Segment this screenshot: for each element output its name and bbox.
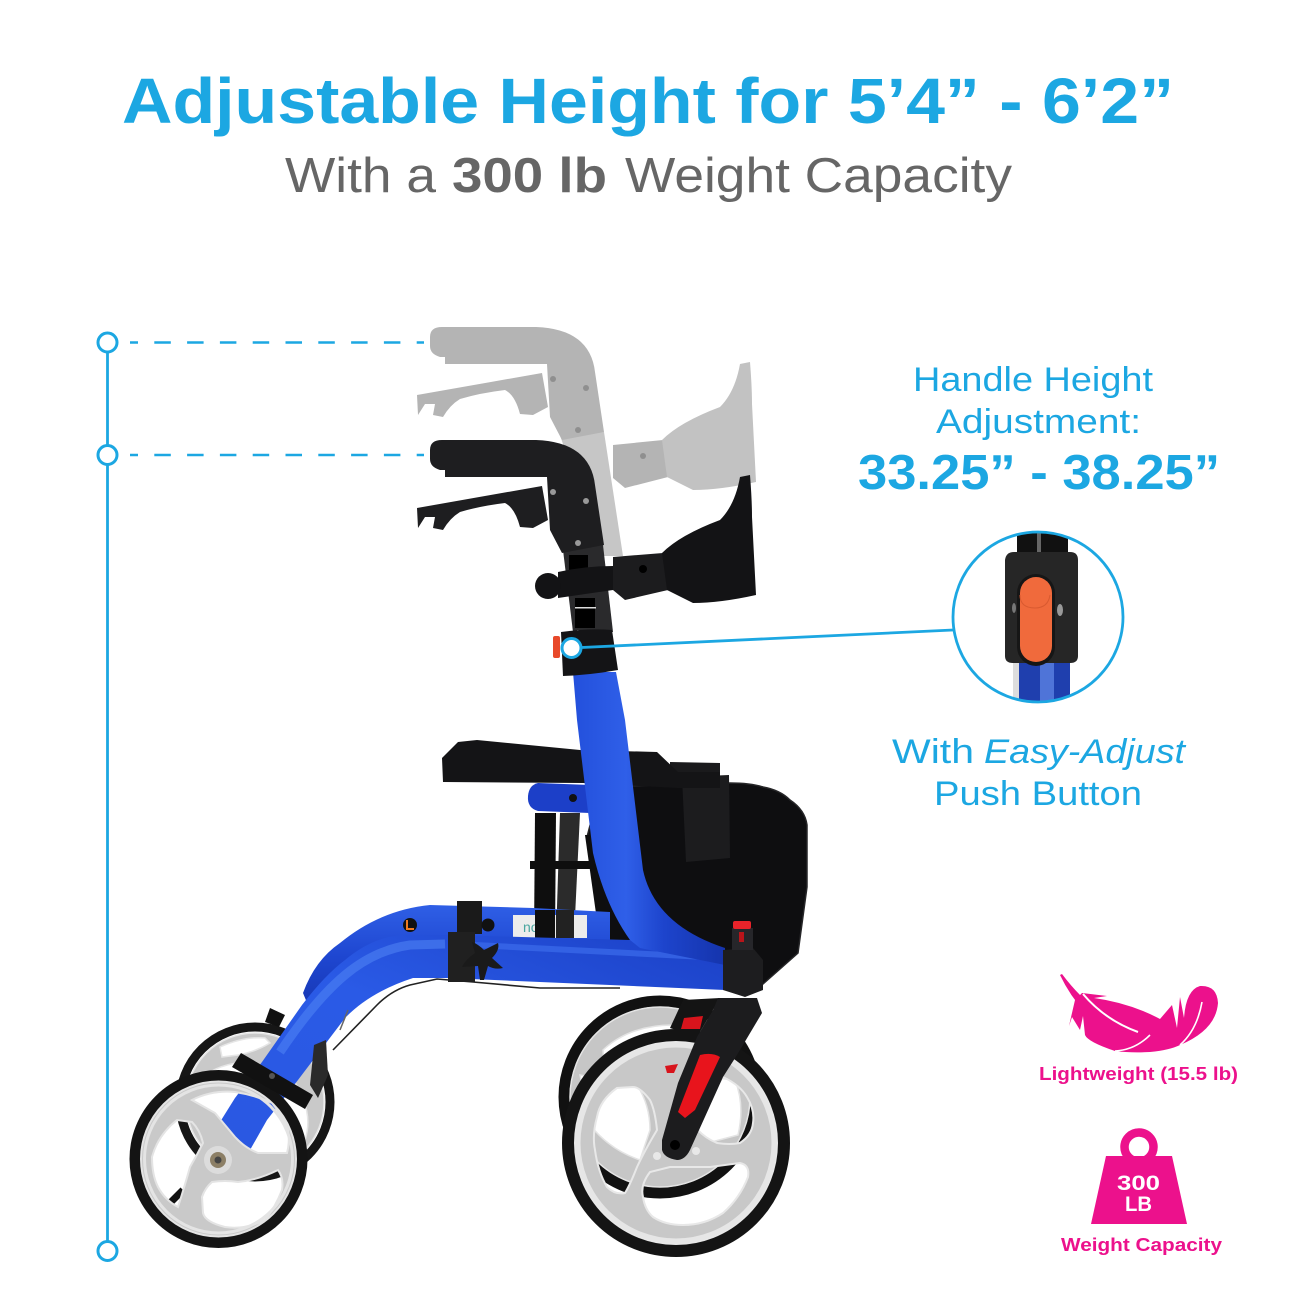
handle post (563, 545, 613, 632)
rear wheel clamp (232, 1008, 328, 1109)
bag (587, 783, 807, 984)
brake housing (723, 921, 763, 997)
brake cable (333, 979, 620, 1050)
easy-adjust text: Push Button (934, 775, 1142, 813)
seat bracket (528, 783, 590, 813)
icon: feather (1060, 974, 1218, 1052)
detail circle: push button (953, 530, 1123, 710)
seat folding legs (530, 813, 612, 942)
handle height text (858, 361, 1220, 500)
velcro strap (682, 775, 730, 862)
backrest with clamp and knob (535, 475, 756, 603)
handle height text: Adjustment: (936, 403, 1141, 441)
height scale with dashed guides (98, 333, 424, 1260)
brake lever (417, 486, 548, 530)
front rear wheel (135, 1076, 302, 1242)
easy-adjust text: With (892, 733, 974, 771)
rollator (135, 440, 807, 1250)
lightweight label: Lightweight (15.5 lb) (1039, 1064, 1238, 1084)
rail clamp and star knob (448, 932, 503, 982)
subtitle: Weight Capacity (625, 149, 1013, 203)
subtitle: 300 lb (452, 149, 607, 203)
subtitle (285, 149, 1013, 203)
seat (442, 740, 720, 788)
easy-adjust text (892, 733, 1187, 813)
front fork with reflectors (662, 998, 762, 1160)
subtitle: With a (285, 149, 437, 203)
upright blue tube (573, 672, 725, 965)
back rear wheel (180, 1027, 330, 1177)
main blue frame tube (220, 935, 725, 1150)
back front wheel (564, 1001, 756, 1193)
push button collar (553, 629, 618, 676)
icon: 300 lb weight (1091, 1132, 1187, 1224)
handle height text: Handle Height (913, 361, 1154, 399)
front big wheel (568, 1036, 784, 1250)
handle height text: 33.25” - 38.25” (858, 446, 1220, 500)
upper blue frame rail with label (303, 901, 610, 1010)
easy-adjust text: Easy-Adjust (984, 733, 1187, 771)
weight capacity label: Weight Capacity (1061, 1235, 1222, 1255)
ghost raised handle (417, 327, 756, 556)
callout line to detail (562, 630, 953, 658)
upper blue frame rail with label: no (523, 919, 539, 935)
black handle (417, 440, 604, 553)
icon: 300 lb weight: 300 (1117, 1172, 1160, 1195)
title: Adjustable Height for 5’4” - 6’2” (122, 65, 1174, 137)
icon: 300 lb weight: LB (1125, 1193, 1152, 1216)
